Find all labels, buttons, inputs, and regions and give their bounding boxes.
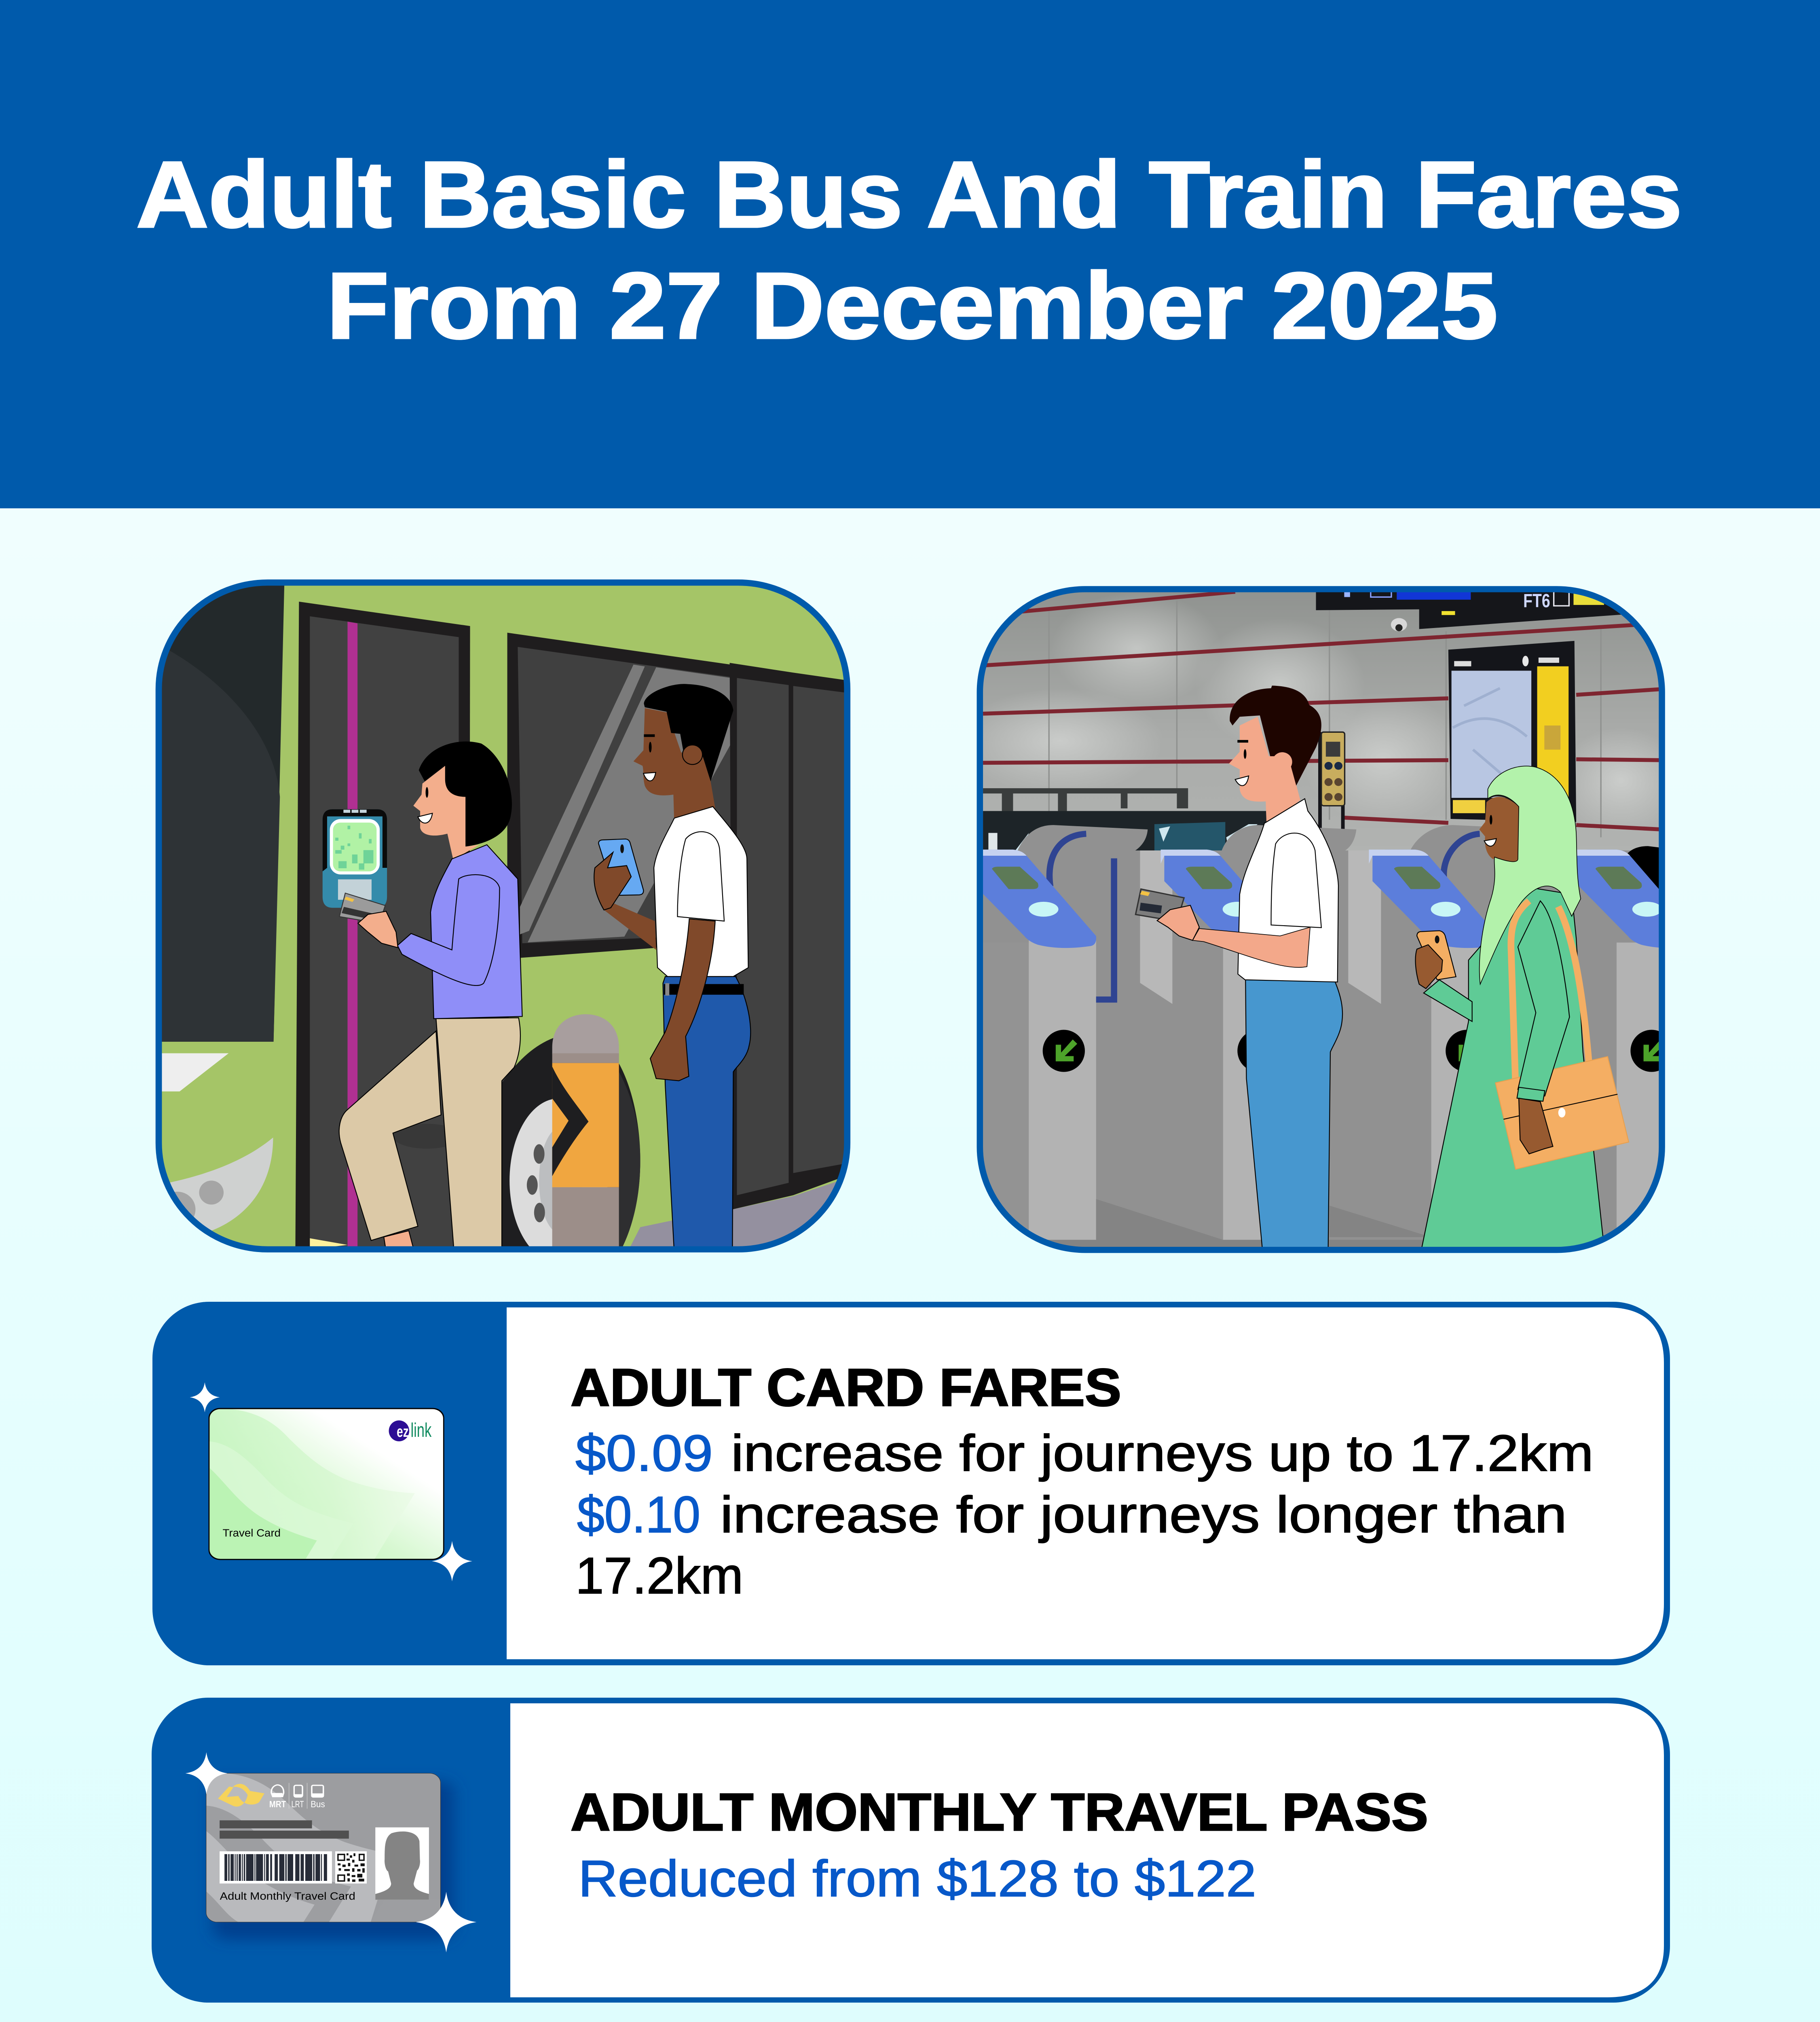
bus windscreen bbox=[154, 580, 284, 1091]
man with phone bbox=[594, 684, 750, 1254]
text: card fare increases: $0.10 bbox=[577, 1486, 700, 1543]
ID photo bbox=[375, 1827, 429, 1900]
icon: sparkle bbox=[185, 1752, 227, 1794]
title: From 27 December 2025 bbox=[327, 254, 1498, 358]
transit icons bbox=[269, 1783, 325, 1810]
rear bus doors bbox=[627, 663, 849, 1254]
text: card fare increases: increase for journeys longer than bbox=[720, 1486, 1567, 1543]
barrier railing and glass bbox=[983, 788, 1270, 855]
transit icons: LRT bbox=[291, 1800, 304, 1810]
safety sign bbox=[1318, 732, 1344, 833]
panel: adult card fares bbox=[152, 1302, 1670, 1665]
icon: travel card bbox=[209, 1408, 444, 1560]
text: card fare increases bbox=[575, 1424, 1594, 1604]
bus window bbox=[507, 633, 731, 961]
header banner bbox=[0, 0, 1820, 508]
icon: monthly travel card: Adult Monthly Travel Card bbox=[220, 1890, 355, 1902]
woman tapping card bbox=[339, 742, 522, 1254]
card reader bbox=[323, 809, 387, 908]
overhead signboard: FT6 bbox=[1523, 590, 1550, 611]
icon: sparkle large bbox=[432, 1541, 472, 1581]
text: card fare increases: $0.09 bbox=[575, 1424, 713, 1482]
title: Adult Basic Bus And Train Fares bbox=[136, 142, 1682, 247]
icon: sparkle bbox=[190, 1382, 220, 1412]
bus wheel bbox=[502, 1032, 640, 1263]
wall stripes bbox=[983, 592, 1661, 829]
icon: travel card: ez bbox=[397, 1423, 409, 1440]
icon: travel card: link bbox=[411, 1419, 432, 1441]
icon: travel card: Travel Card bbox=[223, 1527, 281, 1539]
bus door bbox=[295, 602, 509, 1254]
fare gates bbox=[967, 825, 1700, 1257]
text: pass price reduction: Reduced from $128 to $122 bbox=[578, 1850, 1256, 1907]
barcode bbox=[220, 1851, 332, 1884]
panel: train station gantry illustration bbox=[957, 585, 1700, 1257]
heading: adult card fares: ADULT CARD FARES bbox=[571, 1358, 1121, 1417]
icon: sparkle large bbox=[416, 1892, 476, 1952]
text: card fare increases: 17.2km bbox=[575, 1547, 743, 1604]
overhead signboard bbox=[1316, 588, 1634, 631]
bollard bbox=[552, 1014, 619, 1254]
QR code bbox=[335, 1851, 367, 1884]
station map board bbox=[1448, 641, 1576, 822]
woman in hijab with phone and bag bbox=[1416, 766, 1629, 1256]
heading: adult monthly travel pass: ADULT MONTHLY TRAVEL PASS bbox=[571, 1782, 1428, 1842]
transit icons: MRT bbox=[269, 1800, 286, 1810]
panel: bus boarding illustration bbox=[154, 580, 854, 1263]
man tapping card bbox=[1135, 685, 1342, 1256]
text: card fare increases: increase for journeys up to 17.2km bbox=[731, 1424, 1594, 1482]
icon: monthly travel card bbox=[206, 1773, 454, 1940]
panel: adult monthly travel pass bbox=[152, 1698, 1670, 2003]
bus headlamp bbox=[170, 1138, 273, 1231]
SimplyGo style logo bbox=[218, 1784, 264, 1806]
title bbox=[136, 142, 1682, 358]
transit icons: Bus bbox=[311, 1800, 325, 1810]
